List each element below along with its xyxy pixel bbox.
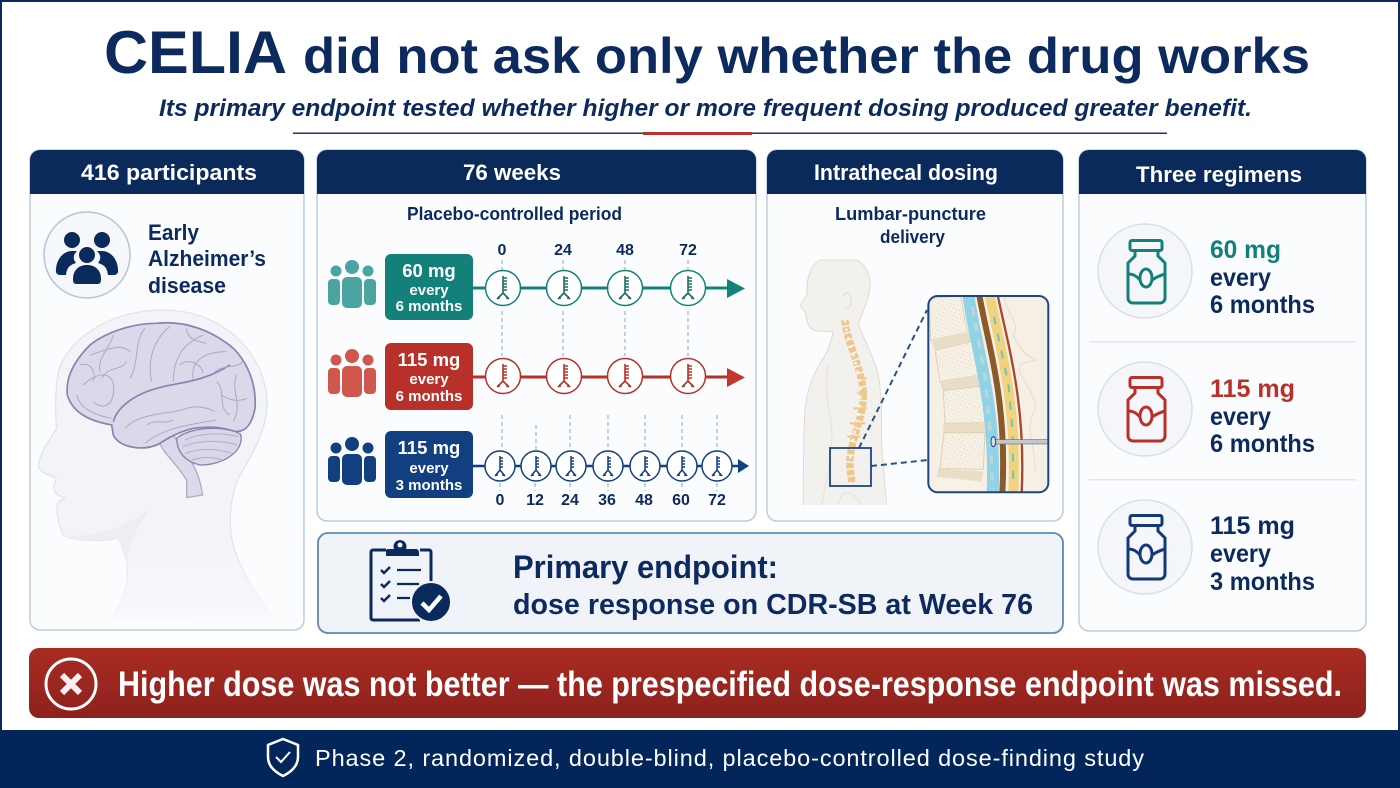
regimen: 60 mg every 6 months: 60 mg xyxy=(1210,236,1281,264)
title: CELIA xyxy=(104,19,287,86)
illustration: body silhouette with spine xyxy=(801,260,887,505)
heading: three regimens: Three regimens xyxy=(1136,162,1302,187)
week labels row 3: 72 xyxy=(708,492,726,509)
heading: 76 weeks: 76 weeks xyxy=(463,160,561,185)
text: Early Alzheimer's disease: Alzheimer’s xyxy=(148,246,266,271)
badge: 115 mg 6 months: 6 months xyxy=(396,388,462,405)
panel: three regimens xyxy=(1079,150,1366,631)
heading: intrathecal dosing: Intrathecal dosing xyxy=(814,160,998,185)
regimen: 115 mg every 3 months: every xyxy=(1210,540,1271,568)
footer: Phase 2, randomized, double-blind, placebo-controlled dose-finding study xyxy=(315,745,1144,771)
week labels row 3: 0 xyxy=(496,492,505,509)
week labels row 1: 72 xyxy=(679,242,697,259)
text: lumbar-puncture delivery xyxy=(835,204,986,247)
spine marks xyxy=(495,456,722,476)
text: Early Alzheimer's disease xyxy=(148,220,266,298)
subtitle: Its primary endpoint tested whether higher or more frequent dosing produced greater benefit. xyxy=(159,95,1252,122)
spine marks xyxy=(497,276,694,299)
week labels row 3: 60 xyxy=(672,492,690,509)
panel: primary endpoint xyxy=(318,533,1063,633)
badge: 60 mg: every xyxy=(409,282,449,299)
badge: 60 mg xyxy=(385,254,473,320)
badge: 60 mg: 6 months xyxy=(396,298,462,315)
regimen: 115 mg every 6 months xyxy=(1098,362,1315,458)
badge: 115 mg 6 months: every xyxy=(409,371,449,388)
icon: red people xyxy=(328,349,376,397)
panel: 416 participants xyxy=(30,150,304,630)
timeline: 115 mg every 6 months xyxy=(328,343,745,410)
icon: navy vial xyxy=(1098,500,1192,594)
regimen: 115 mg every 6 months: 6 months xyxy=(1210,430,1315,458)
regimen: 115 mg every 6 months: every xyxy=(1210,403,1271,431)
icon: clipboard checklist xyxy=(371,540,451,622)
regimen: 115 mg every 3 months: 3 months xyxy=(1210,568,1315,596)
title: did not ask only whether the drug works xyxy=(303,28,1310,84)
text: primary endpoint: dose response on CDR-SB at Week 76 xyxy=(513,589,1033,621)
regimen: 115 mg every 3 months: 115 mg xyxy=(1210,512,1295,540)
text: primary endpoint: Primary endpoint: xyxy=(513,549,778,585)
week labels row 1: 0 xyxy=(498,242,507,259)
icon: red vial xyxy=(1098,362,1192,456)
icon: navy people xyxy=(328,437,376,485)
footer xyxy=(0,730,1400,788)
week labels row 3: 36 xyxy=(598,492,616,509)
week labels row 1 xyxy=(498,242,697,259)
heading: 416 participants: 416 participants xyxy=(81,160,257,185)
callout lines xyxy=(859,310,928,466)
text: lumbar-puncture delivery: delivery xyxy=(880,227,945,247)
badge: 115 mg 3 months: 3 months xyxy=(396,477,462,494)
week labels row 3: 48 xyxy=(635,492,653,509)
badge: 60 mg: 60 mg xyxy=(402,260,456,281)
text: lumbar-puncture delivery: Lumbar-puncture xyxy=(835,204,986,224)
week labels row 3: 24 xyxy=(561,492,579,509)
badge: 115 mg 3 months: 115 mg xyxy=(398,437,460,458)
week labels row 1: 24 xyxy=(554,242,572,259)
timeline: 115 mg every 3 months xyxy=(328,431,749,509)
title xyxy=(104,19,1310,86)
illustration: head with brain xyxy=(38,310,272,618)
text: placebo-controlled period: Placebo-controlled period xyxy=(407,204,622,224)
icon: teal vial xyxy=(1098,224,1192,318)
badge: 115 mg 3 months xyxy=(385,431,473,498)
text: Early Alzheimer's disease: disease xyxy=(148,273,226,298)
regimen: 60 mg every 6 months: 6 months xyxy=(1210,291,1315,319)
callout: result banner xyxy=(29,648,1366,718)
regimen: 60 mg every 6 months xyxy=(1098,224,1315,319)
icon: participants group xyxy=(44,212,130,298)
regimen: 115 mg every 6 months: 115 mg xyxy=(1210,375,1295,403)
text: Early Alzheimer's disease: Early xyxy=(148,220,200,245)
spine marks xyxy=(497,364,694,387)
badge: 115 mg 3 months: every xyxy=(409,460,449,477)
badge: 115 mg 6 months: 115 mg xyxy=(398,349,460,370)
week labels row 1: 48 xyxy=(616,242,634,259)
week labels row 3 xyxy=(496,492,726,509)
icon: shield check xyxy=(268,739,298,776)
panel: intrathecal dosing xyxy=(767,150,1063,521)
panel: 76 weeks xyxy=(317,150,756,521)
icon: teal people xyxy=(328,260,376,308)
badge: 115 mg 6 months xyxy=(385,343,473,410)
week labels row 3: 12 xyxy=(526,492,544,509)
lumbar region marker xyxy=(830,448,871,486)
text: primary endpoint xyxy=(513,549,1033,621)
inset: lumbar puncture anatomy xyxy=(928,293,1050,493)
regimen: 115 mg every 3 months xyxy=(1098,500,1315,596)
timeline: 60 mg every 6 months xyxy=(328,242,745,320)
regimen: 60 mg every 6 months: every xyxy=(1210,264,1271,292)
icon: X in circle xyxy=(46,659,96,709)
